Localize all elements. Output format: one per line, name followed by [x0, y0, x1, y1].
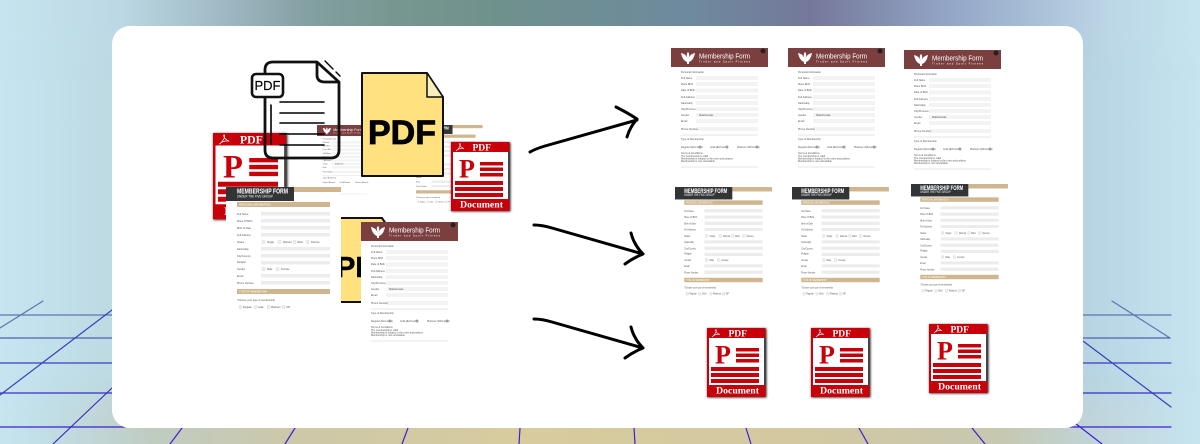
dark form, output 3: VIP	[962, 291, 966, 293]
small maroon form behind: Platinum ($3/month)	[355, 181, 369, 184]
dark form, output 3: Other	[971, 232, 976, 235]
dark form, output 1: TYPE OF MEMBERSHIP	[686, 280, 710, 282]
small maroon form behind: Male/Female	[335, 163, 343, 165]
maroon form, output 3: Membership Form	[932, 56, 983, 62]
dark membership form, large: Platinum	[271, 306, 281, 309]
dark form, output 3: Religion	[920, 251, 929, 253]
maroon membership form, large: Full Name	[371, 251, 383, 254]
maroon form, output 3: Gold ($2/month)	[943, 148, 961, 151]
small maroon form behind: Place Birth	[323, 144, 330, 147]
maroon form, output 1: Gold ($2/month)	[710, 146, 728, 149]
dark form, output 2: Birth of Date	[801, 222, 814, 225]
maroon membership form, large: Terms & Conditions	[371, 326, 393, 329]
dark form, output 2: Email	[801, 266, 807, 268]
dark membership form, large: UNDER THE FIVE GROUP	[237, 194, 273, 198]
dark form, output 2: TYPE OF MEMBERSHIP	[803, 280, 827, 282]
dark form, output 1: Nationality	[684, 241, 695, 244]
maroon form, output 2: Platinum ($3/month)	[854, 146, 877, 149]
maroon membership form, large: Gold ($2/month)	[400, 320, 418, 323]
maroon form, output 2: City/Province	[798, 108, 813, 111]
maroon form, output 2: Full Address	[798, 96, 813, 99]
small maroon form behind: Gold ($2/month)	[340, 181, 351, 184]
maroon form, output 3: Full Address	[914, 98, 929, 101]
icon: PDF document, output 1: PDF	[728, 330, 747, 340]
maroon form, output 1: The membership is valid	[681, 155, 709, 158]
dark form, output 2: Gender	[801, 259, 809, 262]
maroon form, output 2: Tinder and Sport Fitness	[816, 59, 868, 63]
maroon form, output 2: Full Name	[798, 77, 810, 80]
maroon membership form, large: Membership is subject to the rules and policies	[371, 332, 424, 334]
dark form, output 2: UNDER THE FIVE GROUP	[801, 193, 832, 197]
maroon form, output 1: Platinum ($3/month)	[737, 146, 760, 149]
dark form, output 1: Regular	[689, 293, 697, 296]
maroon form, output 3: Membership is non-refundable	[914, 162, 948, 165]
icon: yellow PDF file	[362, 73, 443, 176]
icon: PDF document, output 2	[811, 328, 870, 398]
dark form, output 3: *Choose your type of membership	[920, 283, 953, 286]
dark form, output 3: Gender	[920, 256, 928, 259]
small dark form behind: Gender	[416, 177, 422, 179]
dark membership form, large: Female	[281, 268, 290, 271]
dark membership form, large: Divorce	[311, 241, 320, 244]
maroon form, output 1: Membership is subject to the rules and policies	[681, 158, 734, 160]
maroon form, output 2: Membership Form	[816, 54, 867, 60]
maroon membership form, large: Phone Number	[371, 302, 388, 305]
dark form, output 2: PERSONAL INFORMATION	[803, 201, 830, 204]
maroon form, output 1: Gender	[681, 114, 690, 117]
icon: PDF document, output 3: P	[937, 336, 953, 366]
dark form, output 1: Single	[710, 236, 716, 238]
dark membership form, large: TYPE OF MEMBERSHIP	[239, 290, 268, 294]
small maroon form behind: Full Name	[323, 142, 330, 144]
dark form, output 3: Status	[920, 232, 926, 235]
dark form, output 2: Phone Number	[801, 271, 816, 274]
dark form, output 3: UNDER THE FIVE GROUP	[920, 190, 951, 194]
white card	[112, 26, 1083, 428]
dark membership form, large: Gender	[237, 268, 246, 271]
dark membership form, large: *Choose your type of membership	[237, 299, 275, 302]
maroon form, output 2: Date of Birth	[798, 89, 813, 92]
dark form, output 3: Full Address	[920, 226, 932, 229]
dark form, output 2: Married	[840, 235, 848, 238]
icon: PDF document, output 3: Document	[938, 382, 982, 392]
icon: yellow PDF file: PDF	[368, 114, 436, 152]
dark form, output 2: VIP	[843, 294, 847, 296]
small dark form behind: Phone Number	[416, 186, 427, 188]
icon: yellow PDF file, partly hidden: PDF	[336, 252, 394, 284]
dark form, output 2: Divorce	[864, 235, 872, 238]
small dark form behind: Gold	[429, 201, 433, 203]
maroon form, output 2: Personal Information	[798, 71, 822, 74]
small dark form behind: Birth of Date	[416, 150, 425, 153]
dark form, output 1: City/Country	[684, 247, 697, 250]
icon: red PDF document, right of cluster: Document	[460, 200, 504, 210]
maroon form, output 3: Type of Membership	[914, 140, 937, 143]
dark form, output 1: Gender	[684, 259, 692, 262]
arrow: to PDF icons	[534, 319, 643, 358]
maroon membership form, large: The membership is valid	[371, 329, 399, 332]
maroon membership form, large: Tinder and Sport Fitness	[389, 233, 441, 237]
maroon form, output 3: Platinum ($3/month)	[970, 148, 993, 151]
dark form, output 1: PERSONAL INFORMATION	[686, 201, 713, 204]
dark form, output 3: MEMBERSHIP FORM	[920, 186, 963, 192]
maroon membership form, large: Platinum ($3/month)	[427, 320, 450, 323]
maroon form, output 1: Regular ($1/month)	[681, 146, 703, 149]
dark form, output 2: Full Name	[801, 211, 812, 213]
dark form, output 3: Full Name	[920, 208, 931, 210]
icon: red PDF document, left of cluster: PDF	[240, 133, 263, 147]
maroon form, output 2: Male/Female	[816, 114, 831, 117]
dark form, output 2: Platinum	[830, 293, 838, 296]
dark membership form, large: PERSONAL INFORMATION	[239, 204, 271, 206]
dark form, output 3: Female	[957, 257, 965, 259]
maroon form, output 2: Terms & Conditions	[798, 152, 820, 155]
maroon form, output 1: Place Birth	[681, 83, 694, 86]
small maroon form behind: Tinder and Sport Fitness	[333, 131, 363, 134]
small maroon form behind: Regular ($1/month)	[323, 181, 336, 184]
dark form, output 3: Regular	[925, 290, 933, 293]
maroon form, output 2: The membership is valid	[798, 155, 826, 158]
maroon form, output 1: Phone Number	[681, 128, 698, 131]
small maroon form behind: Phone Number	[323, 172, 333, 174]
maroon membership form, large: Date of Birth	[371, 263, 386, 266]
dark form, output 2: Status	[801, 235, 807, 238]
maroon form, output 3: Regular ($1/month)	[914, 148, 936, 151]
dark form, output 1: Place Of Birth	[684, 216, 698, 219]
dark form, output 3: Single	[946, 233, 952, 235]
dark membership form, large: VIP	[286, 306, 290, 309]
dark form, output 1: Platinum	[713, 293, 721, 296]
dark form, output 2: City/Country	[801, 247, 814, 250]
dark form, output 1: Divorce	[747, 235, 755, 238]
dark membership form, large: Other	[297, 241, 303, 244]
dark membership form, large: Gold	[258, 306, 264, 309]
maroon form, output 2: Gender	[798, 114, 807, 117]
icon: outlined PDF file	[252, 61, 340, 158]
icon: PDF document, output 2: PDF	[832, 330, 851, 340]
maroon form, output 3: Gender	[914, 116, 923, 119]
maroon form, output 2: Phone Number	[798, 128, 815, 131]
icon: PDF document, output 2: P	[819, 340, 835, 370]
maroon form, output 1: Type of Membership	[681, 138, 704, 141]
maroon form, output 2: Membership is subject to the rules and policies	[798, 158, 851, 160]
dark form, output 3: TYPE OF MEMBERSHIP	[922, 277, 946, 279]
dark form, output 2: Male	[827, 260, 832, 262]
dark form, output 2: Place Of Birth	[801, 216, 815, 219]
small dark form behind: Full Name	[416, 142, 423, 144]
dark membership form, large	[226, 187, 341, 317]
dark form, output 1: Status	[684, 235, 690, 238]
dark membership form, large: City/Country	[237, 255, 252, 258]
icon: outlined PDF file: PDF	[254, 78, 281, 93]
dark form, output 1	[675, 187, 772, 296]
dark form, output 3: Married	[959, 232, 967, 235]
maroon form, output 2: Membership is non-refundable	[798, 160, 832, 163]
dark form, output 3: Gold	[938, 291, 943, 293]
dark membership form, large: Single	[267, 241, 275, 244]
dark form, output 3	[911, 184, 1008, 293]
dark form, output 1: Full Address	[684, 229, 696, 232]
dark membership form, large: Email	[237, 275, 244, 278]
arrow: to maroon forms	[530, 107, 637, 152]
icon: red PDF document, left of cluster: Document	[224, 205, 278, 218]
small maroon form behind	[317, 125, 373, 194]
dark form, output 3: Place Of Birth	[920, 213, 934, 216]
maroon form, output 3: Place Birth	[914, 85, 927, 88]
dark form, output 3: Phone Number	[920, 268, 935, 271]
small maroon form behind: Full Address	[323, 152, 331, 155]
maroon form, output 3: Terms & Conditions	[914, 154, 936, 157]
dark membership form, large: Place Of Birth	[237, 220, 253, 223]
dark form, output 3: Divorce	[983, 232, 991, 235]
small maroon form behind: Gender	[323, 163, 328, 165]
dark membership form, large: Regular	[243, 306, 252, 309]
dark form, output 3: Birth of Date	[920, 219, 933, 222]
dark membership form, large: Status	[237, 241, 245, 244]
maroon form, output 1	[671, 48, 768, 167]
dark form, output 2	[792, 187, 889, 296]
maroon form, output 2: Gold ($2/month)	[827, 146, 845, 149]
dark form, output 1: VIP	[726, 294, 730, 296]
maroon form, output 1: Membership is non-refundable	[681, 160, 715, 163]
maroon form, output 1: Date of Birth	[681, 89, 696, 92]
small dark form behind: *Choose your type of membership	[416, 196, 440, 199]
dark form, output 1: Female	[721, 260, 729, 262]
dark form, output 2: Nationality	[801, 241, 812, 244]
dark membership form, large: Male	[267, 268, 273, 271]
icon: PDF document, output 1	[707, 328, 766, 398]
dark form, output 3: PERSONAL INFORMATION	[922, 198, 949, 201]
maroon form, output 3: Date of Birth	[914, 91, 929, 94]
dark form, output 1: Married	[723, 235, 731, 238]
maroon membership form, large	[361, 222, 458, 346]
dark membership form, large: Phone Number	[237, 282, 254, 285]
maroon form, output 1: Terms & Conditions	[681, 152, 703, 155]
maroon form, output 1: Email	[681, 120, 688, 123]
dark form, output 1: *Choose your type of membership	[684, 286, 717, 289]
dark membership form, large: Nationality	[237, 248, 249, 251]
dark form, output 2: Other	[852, 235, 857, 238]
maroon membership form, large: Email	[371, 294, 378, 297]
dark form, output 2: Full Address	[801, 229, 813, 232]
maroon form, output 3: Male/Female	[932, 116, 947, 119]
maroon membership form, large: Full Address	[371, 270, 386, 273]
dark form, output 1: Birth of Date	[684, 222, 697, 225]
small dark form behind: Religion	[416, 173, 422, 175]
maroon form, output 2: Nationality	[798, 102, 810, 105]
maroon membership form, large: Place Birth	[371, 257, 384, 260]
maroon form, output 3: The membership is valid	[914, 157, 942, 160]
dark form, output 3: Male	[946, 257, 951, 259]
dark form, output 1: Email	[684, 266, 690, 268]
arrow: to dark forms	[534, 225, 643, 264]
maroon form, output 3: Email	[914, 122, 921, 125]
dark form, output 1: Other	[735, 235, 740, 238]
dark form, output 2: Single	[827, 236, 833, 238]
icon: PDF document, output 1: P	[715, 340, 731, 370]
maroon membership form, large: Gender	[371, 288, 380, 291]
small dark form behind	[409, 125, 483, 203]
small maroon form behind: Date of Birth	[323, 148, 331, 151]
small maroon form behind: Type of Membership	[323, 177, 336, 179]
maroon form, output 2: Place Birth	[798, 83, 811, 86]
dark form, output 1: Phone Number	[684, 271, 699, 274]
maroon membership form, large: Regular ($1/month)	[371, 320, 393, 323]
small dark form behind: Nationality	[416, 163, 424, 166]
small dark form behind: VIP	[447, 201, 450, 203]
dark membership form, large: MEMBERSHIP FORM	[237, 189, 288, 196]
dark membership form, large: Full Address	[237, 234, 252, 237]
maroon form, output 3: Full Name	[914, 79, 926, 82]
maroon form, output 2	[788, 48, 885, 167]
small maroon form behind: Email	[323, 167, 327, 169]
dark form, output 1: Gold	[702, 294, 707, 296]
maroon form, output 1: Full Address	[681, 96, 696, 99]
dark form, output 1: UNDER THE FIVE GROUP	[684, 193, 715, 197]
maroon form, output 3: Membership is subject to the rules and policies	[914, 160, 967, 162]
dark form, output 2: *Choose your type of membership	[801, 286, 834, 289]
maroon form, output 2: Type of Membership	[798, 138, 821, 141]
icon: red PDF document, left of cluster	[213, 133, 287, 220]
small maroon form behind: City/Province	[323, 159, 331, 162]
maroon membership form, large: Membership is non-refundable	[371, 334, 405, 337]
dark form, output 2: Religion	[801, 254, 810, 256]
icon: PDF document, output 1: Document	[716, 386, 760, 396]
maroon form, output 1: Male/Female	[699, 114, 714, 117]
dark form, output 3: Nationality	[920, 238, 931, 241]
dark membership form, large: Married	[283, 241, 292, 244]
small dark form behind: Email	[416, 182, 421, 184]
maroon form, output 1: Full Name	[681, 77, 693, 80]
dark form, output 1: MEMBERSHIP FORM	[684, 189, 727, 195]
dark membership form, large: Full Name	[237, 213, 249, 216]
dark membership form, large: Birth of Date	[237, 227, 252, 230]
dark form, output 1: Full Name	[684, 211, 695, 213]
maroon form, output 3: Personal Information	[914, 73, 938, 76]
maroon membership form, large: Nationality	[371, 276, 383, 279]
icon: red PDF document, right of cluster	[451, 142, 510, 212]
small dark form behind: Full Address	[416, 154, 425, 157]
icon: yellow PDF file, partly hidden	[318, 218, 397, 302]
dark form, output 3: City/Country	[920, 244, 933, 247]
icon: red PDF document, right of cluster: P	[459, 154, 475, 184]
maroon form, output 1: Membership Form	[699, 54, 750, 60]
icon: PDF document, output 3: PDF	[950, 326, 969, 336]
dark form, output 2: MEMBERSHIP FORM	[801, 189, 844, 195]
maroon form, output 3	[904, 50, 1001, 169]
maroon form, output 2: Email	[798, 120, 805, 123]
small dark form behind: Regular	[420, 201, 426, 203]
icon: red PDF document, right of cluster: PDF	[472, 144, 491, 154]
dark membership form, large: Religion	[237, 261, 247, 264]
perspective grid	[0, 301, 1171, 444]
small dark form behind: Platinum	[438, 200, 445, 203]
maroon membership form, large: Male/Female	[389, 288, 404, 291]
maroon membership form, large: Personal Information	[371, 245, 395, 248]
maroon form, output 3: Phone Number	[914, 130, 931, 133]
small dark form behind: Place Of Birth	[416, 145, 426, 148]
dark form, output 1: Male	[710, 260, 715, 262]
maroon form, output 3: Nationality	[914, 104, 926, 107]
small dark form behind: UNDER THE FIVE GROUP	[416, 131, 439, 133]
maroon form, output 3: Tinder and Sport Fitness	[932, 61, 984, 65]
dark form, output 2: Female	[838, 260, 846, 262]
icon: PDF document, output 3	[929, 324, 988, 394]
maroon form, output 3: City/Province	[914, 110, 929, 113]
dark form, output 1: Religion	[684, 254, 693, 256]
dark form, output 3: Email	[920, 263, 926, 265]
small maroon form behind: Nationality	[323, 155, 330, 158]
small dark form behind: City/Country	[416, 168, 425, 171]
small maroon form behind: Personal Information	[323, 138, 336, 141]
dark form, output 2: Gold	[819, 294, 824, 296]
maroon form, output 1: City/Province	[681, 108, 696, 111]
icon: red PDF document, left of cluster: P	[223, 149, 243, 185]
dark form, output 3: Platinum	[949, 290, 957, 293]
maroon form, output 1: Personal Information	[681, 71, 705, 74]
small dark form behind: Status	[416, 159, 421, 162]
maroon membership form, large: Membership Form	[389, 228, 440, 234]
dark form, output 2: Regular	[806, 293, 814, 296]
maroon form, output 1: Tinder and Sport Fitness	[699, 59, 751, 63]
small dark form behind: MEMBERSHIP FORM	[416, 125, 449, 130]
maroon form, output 2: Regular ($1/month)	[798, 146, 820, 149]
maroon membership form, large: City/Province	[371, 282, 386, 285]
maroon membership form, large: Type of Membership	[371, 312, 394, 315]
maroon form, output 1: Nationality	[681, 102, 693, 105]
small maroon form behind: Membership Form	[333, 127, 363, 132]
icon: PDF document, output 2: Document	[820, 386, 864, 396]
